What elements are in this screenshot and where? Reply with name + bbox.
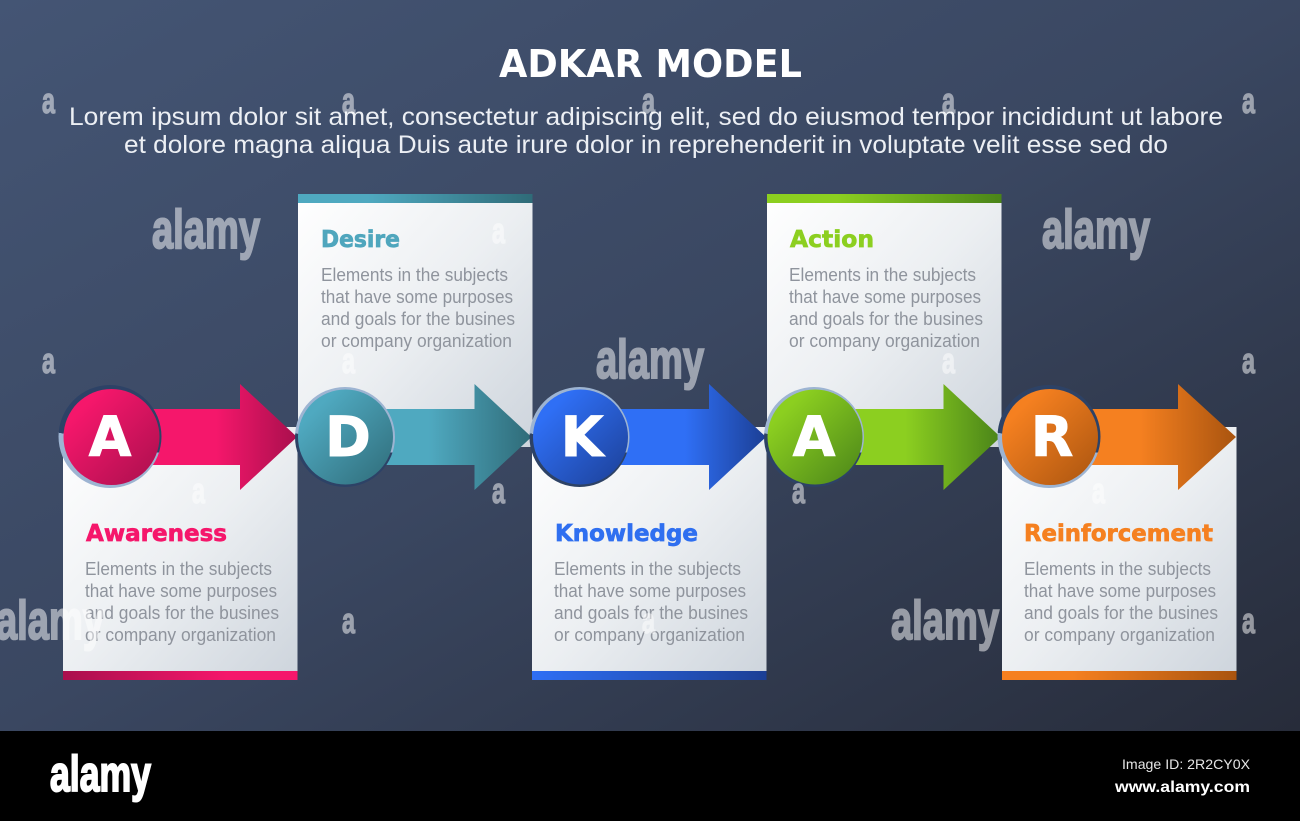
watermarks: a xyxy=(42,80,56,121)
description: or company organization xyxy=(554,625,745,645)
intro text: Lorem ipsum dolor sit amet, consectetur adipiscing elit, sed do eiusmod tempor incididunt ut labore xyxy=(69,103,1223,131)
title: ADKAR MODEL xyxy=(499,42,802,86)
accent bar xyxy=(298,194,532,203)
badge: R xyxy=(998,385,1100,488)
badge: R: R xyxy=(1031,405,1073,469)
panel: knowledge card xyxy=(532,427,766,680)
badge: A xyxy=(764,387,864,487)
description: that have some purposes xyxy=(85,581,277,601)
heading: reinforcement: Reinforcement xyxy=(1024,521,1213,547)
badge: A: A xyxy=(89,405,132,469)
watermarks: a xyxy=(342,340,356,381)
arrow: desire xyxy=(385,384,532,490)
heading: awareness: Awareness xyxy=(86,521,227,547)
watermarks: a xyxy=(942,80,956,121)
panel: reinforcement card xyxy=(1002,427,1236,680)
description xyxy=(1024,559,1218,645)
arrow: reinforcement xyxy=(1088,384,1236,490)
watermarks: a xyxy=(192,470,206,511)
watermarks: a xyxy=(942,340,956,381)
watermarks xyxy=(0,80,1256,651)
description xyxy=(85,559,279,645)
description xyxy=(789,265,983,351)
accent bar xyxy=(767,194,1002,203)
description xyxy=(554,559,748,645)
website: www.alamy.com xyxy=(1114,779,1250,796)
description: that have some purposes xyxy=(554,581,746,601)
heading: desire: Desire xyxy=(321,227,400,253)
description: and goals for the busines xyxy=(789,309,983,329)
panel: action card xyxy=(767,194,1002,447)
description: that have some purposes xyxy=(1024,581,1216,601)
arrow: awareness xyxy=(150,384,297,490)
badge: K xyxy=(530,387,630,487)
description: and goals for the busines xyxy=(321,309,515,329)
image id: Image ID: 2R2CY0X xyxy=(1122,756,1251,772)
watermarks: a xyxy=(642,600,656,641)
description: Elements in the subjects xyxy=(1024,559,1211,579)
panel: awareness card xyxy=(63,427,298,680)
watermarks: alamy xyxy=(0,589,104,651)
watermarks: alamy xyxy=(152,198,260,260)
description: and goals for the busines xyxy=(1024,603,1218,623)
description: that have some purposes xyxy=(789,287,981,307)
watermarks: alamy xyxy=(1042,198,1150,260)
description: or company organization xyxy=(321,331,512,351)
accent bar xyxy=(1002,671,1236,680)
panel: desire card xyxy=(298,194,532,447)
badge: A xyxy=(58,385,162,488)
watermarks: a xyxy=(642,80,656,121)
description: or company organization xyxy=(85,625,276,645)
accent bar xyxy=(63,671,298,680)
watermarks: a xyxy=(492,470,506,511)
description: and goals for the busines xyxy=(554,603,748,623)
description xyxy=(321,265,515,351)
watermarks: a xyxy=(342,600,356,641)
description: Elements in the subjects xyxy=(321,265,508,285)
badge: D: D xyxy=(325,405,371,469)
arrow: knowledge xyxy=(619,384,766,490)
intro text xyxy=(69,103,1223,159)
badge: K: K xyxy=(561,405,606,469)
heading: knowledge: Knowledge xyxy=(555,521,698,547)
heading: action: Action xyxy=(790,227,874,253)
accent bar xyxy=(532,671,766,680)
watermarks: alamy xyxy=(596,328,704,390)
watermarks: a xyxy=(1092,470,1106,511)
description: or company organization xyxy=(789,331,980,351)
watermarks: a xyxy=(492,210,506,251)
description: that have some purposes xyxy=(321,287,513,307)
watermarks: a xyxy=(342,80,356,121)
description: Elements in the subjects xyxy=(789,265,976,285)
watermarks: a xyxy=(42,340,56,381)
watermarks: alamy xyxy=(891,589,999,651)
description: Elements in the subjects xyxy=(85,559,272,579)
watermarks: a xyxy=(1242,600,1256,641)
description: or company organization xyxy=(1024,625,1215,645)
watermarks: a xyxy=(1242,80,1256,121)
description: Elements in the subjects xyxy=(554,559,741,579)
arrow: action xyxy=(854,384,1000,490)
watermarks: a xyxy=(792,470,806,511)
footer logo: alamy xyxy=(50,746,151,802)
badge: A: A xyxy=(793,405,836,469)
description: and goals for the busines xyxy=(85,603,279,623)
badge: D xyxy=(295,387,395,487)
watermarks: a xyxy=(1242,340,1256,381)
footer band xyxy=(0,731,1300,821)
intro text: et dolore magna aliqua Duis aute irure dolor in reprehenderit in voluptate velit esse sed do xyxy=(124,131,1168,159)
